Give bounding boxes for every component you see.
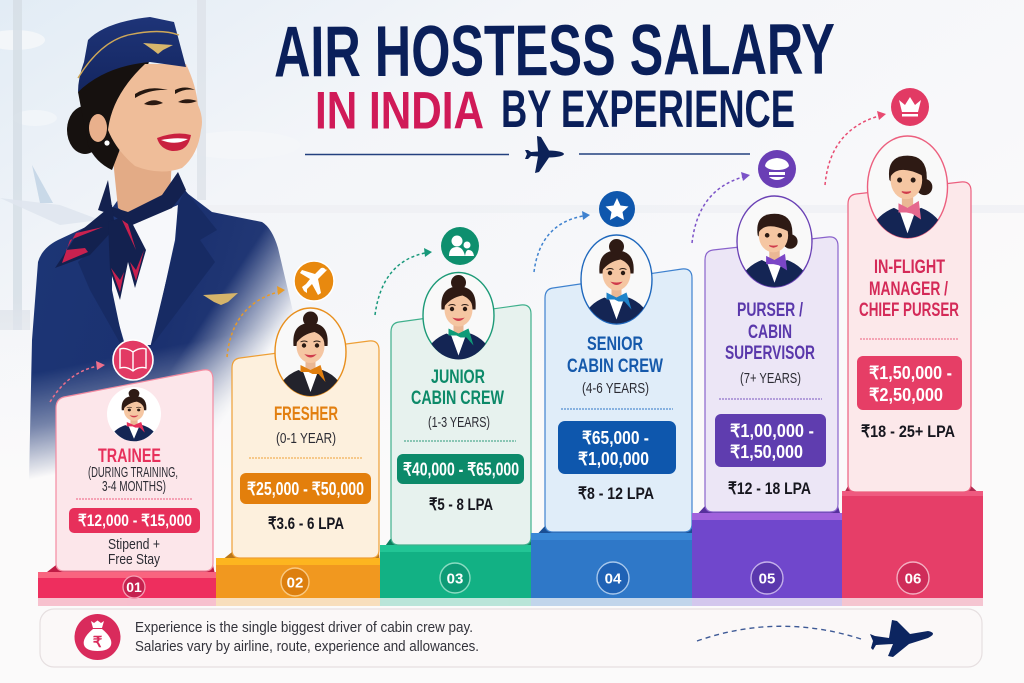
number 01: 01 xyxy=(126,579,142,595)
duration 01: 3-4 MONTHS) xyxy=(102,479,166,495)
salary pill 04: ₹65,000 - xyxy=(582,428,649,448)
footer text: Salaries vary by airline, route, experience and allowances. xyxy=(135,639,479,655)
ear xyxy=(89,114,110,146)
portrait 02 xyxy=(275,308,346,400)
hat xyxy=(78,17,186,92)
step 03: junior cabin crew xyxy=(380,272,531,598)
number 05 xyxy=(751,562,783,594)
icon: plane xyxy=(294,261,334,301)
annual 05: ₹12 - 18 LPA xyxy=(728,479,811,498)
card 06 xyxy=(848,182,971,492)
number 04 xyxy=(597,562,629,594)
hair and bun xyxy=(67,58,150,170)
arrow 06 xyxy=(825,111,886,185)
portrait 01 xyxy=(107,387,161,444)
number 01 xyxy=(123,576,145,598)
number 06 xyxy=(897,562,929,594)
role 04: CABIN CREW xyxy=(567,356,663,377)
number 02 xyxy=(281,568,309,596)
number 03 xyxy=(440,563,470,593)
role 03 xyxy=(411,367,504,409)
divider with plane xyxy=(305,136,750,173)
step 04: senior cabin crew xyxy=(531,235,692,598)
photo: smiling air hostess xyxy=(29,17,300,480)
role 05 xyxy=(725,300,815,364)
face xyxy=(108,64,202,172)
annual 02: ₹3.6 - 6 LPA xyxy=(268,514,344,533)
duration 02: (0-1 YEAR) xyxy=(276,431,336,447)
salary pill 02 xyxy=(240,473,371,504)
card 01 xyxy=(56,370,213,571)
duration 04: (4-6 YEARS) xyxy=(582,381,649,397)
salary pill 04 xyxy=(558,421,676,474)
role 05: PURSER / xyxy=(737,300,804,321)
card 02 xyxy=(232,341,379,558)
scarf xyxy=(55,172,186,300)
role 06: IN-FLIGHT xyxy=(874,257,945,278)
footer panel xyxy=(38,598,983,667)
arrow 02 xyxy=(227,286,285,357)
annual 06: ₹18 - 25+ LPA xyxy=(861,422,955,441)
portrait 05 xyxy=(737,196,812,291)
duration 01: (DURING TRAINING, xyxy=(88,465,178,481)
note 01 xyxy=(108,537,161,568)
duration 05: (7+ YEARS) xyxy=(740,371,801,387)
salary pill 01 xyxy=(69,508,200,533)
icon: pilot cap xyxy=(758,150,796,188)
arrow 04 xyxy=(534,211,590,272)
reflection strip xyxy=(38,598,983,606)
number 04: 04 xyxy=(605,570,622,588)
step 02: fresher xyxy=(216,308,380,598)
note 01: Stipend + xyxy=(108,537,160,553)
salary pill 06: ₹2,50,000 xyxy=(869,385,943,405)
icon: crown xyxy=(891,88,929,126)
role 04 xyxy=(567,334,663,377)
salary pill 03: ₹40,000 - ₹65,000 xyxy=(403,460,519,480)
number 03: 03 xyxy=(447,570,463,588)
subtitle xyxy=(315,80,795,140)
card 05 xyxy=(705,237,838,512)
annual 04: ₹8 - 12 LPA xyxy=(578,484,654,503)
salary pill 03 xyxy=(397,454,524,484)
role 03: JUNIOR xyxy=(431,367,485,388)
duration 01 xyxy=(88,465,178,495)
facial features xyxy=(135,88,197,151)
neck xyxy=(112,150,172,222)
portrait 06 xyxy=(868,136,948,243)
arrow 03 xyxy=(375,248,432,315)
salary pill 01: ₹12,000 - ₹15,000 xyxy=(78,512,192,530)
arrow 05 xyxy=(692,172,750,243)
salary pill 05: ₹1,50,000 xyxy=(730,442,803,462)
podium 01 xyxy=(38,565,216,598)
note 01: Free Stay xyxy=(108,552,161,568)
salary pill 05 xyxy=(715,414,826,467)
card 04 xyxy=(545,269,692,532)
salary pill 02: ₹25,000 - ₹50,000 xyxy=(247,479,364,499)
lapel wings badge xyxy=(203,293,238,305)
salary pill 05: ₹1,00,000 - xyxy=(730,421,814,441)
podium 03 xyxy=(380,538,531,598)
podium 02 xyxy=(216,552,380,598)
role 05: CABIN xyxy=(748,322,792,343)
portrait 04 xyxy=(581,235,652,328)
role 02: FRESHER xyxy=(274,404,338,425)
number 05: 05 xyxy=(759,570,775,588)
podium 05 xyxy=(692,506,842,598)
salary pill 06: ₹1,50,000 - xyxy=(869,363,952,383)
icon: book xyxy=(113,340,153,380)
role 01: TRAINEE xyxy=(98,446,161,467)
podium 06 xyxy=(842,486,983,598)
step 01: trainee xyxy=(38,370,216,598)
subtitle: IN INDIA xyxy=(315,82,484,140)
step 06: in-flight manager xyxy=(842,136,983,598)
salary pill 06 xyxy=(857,356,962,410)
icon: money bag: ₹ xyxy=(93,634,103,651)
shirt xyxy=(112,205,178,345)
portrait 03 xyxy=(423,272,494,364)
role 05: SUPERVISOR xyxy=(725,343,815,364)
number 02: 02 xyxy=(287,574,303,592)
blazer xyxy=(29,190,300,480)
subtitle: BY EXPERIENCE xyxy=(501,80,795,139)
icon: money bag xyxy=(74,614,120,660)
footer text xyxy=(135,620,479,655)
podium 04 xyxy=(531,526,692,598)
annual 03: ₹5 - 8 LPA xyxy=(429,495,493,514)
number 06: 06 xyxy=(905,570,921,588)
dashed flight path xyxy=(697,626,864,641)
role 04: SENIOR xyxy=(587,334,643,355)
footer text: Experience is the single biggest driver of cabin crew pay. xyxy=(135,620,473,636)
role 03: CABIN CREW xyxy=(411,388,504,409)
icon: footer plane xyxy=(870,620,933,657)
step 05: purser xyxy=(692,196,842,598)
arrow 01 xyxy=(50,361,105,402)
salary pill 04: ₹1,00,000 xyxy=(578,449,649,469)
card 03 xyxy=(391,305,531,545)
icon: people xyxy=(441,227,479,265)
duration 03: (1-3 YEARS) xyxy=(428,415,490,431)
role 06 xyxy=(859,257,959,321)
role 06: MANAGER / xyxy=(869,279,949,300)
role 06: CHIEF PURSER xyxy=(859,300,959,321)
lapels xyxy=(78,190,217,352)
icon: star xyxy=(599,191,635,227)
